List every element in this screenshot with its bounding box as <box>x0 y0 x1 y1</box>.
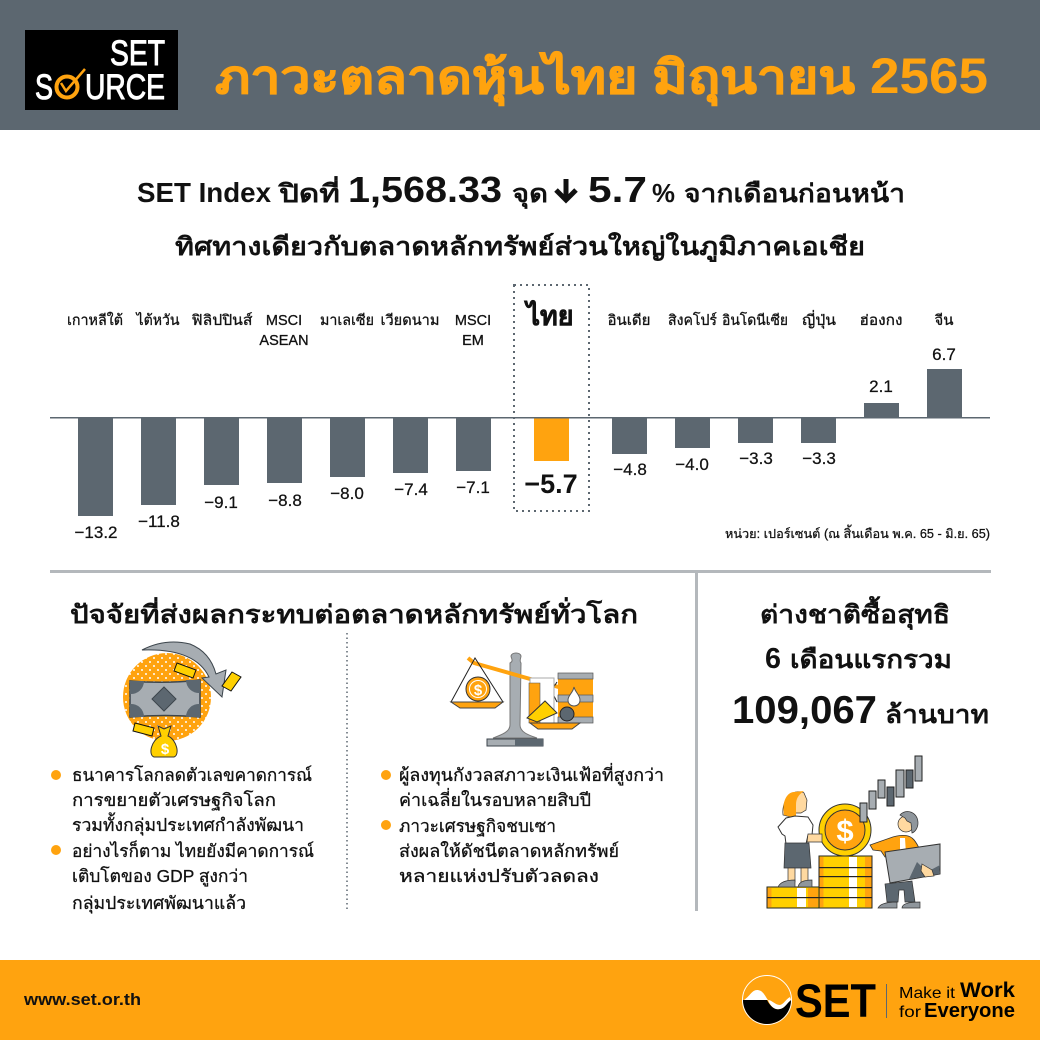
logo: SET <box>742 974 1015 1027</box>
text block: left bullets: ธนาคารโลกลดตัวเลขคาดการณ์ <box>72 765 312 785</box>
value labels: −5.7 <box>524 469 578 499</box>
headline: SET Index <box>137 177 271 208</box>
icon: investors and coins <box>767 756 940 908</box>
icon: down arrow <box>556 179 576 200</box>
value labels: −8.8 <box>268 491 302 510</box>
icon: falling banknote <box>123 642 241 758</box>
header band <box>0 0 1040 130</box>
value labels: −3.3 <box>802 449 836 468</box>
logo: SET: Everyone <box>924 1000 1015 1022</box>
title: 2565 <box>870 48 988 104</box>
text block: left bullets: การขยายตัวเศรษฐกิจโลก <box>72 790 276 811</box>
category labels: ไทย <box>524 300 574 331</box>
category labels: MSCI <box>266 313 302 329</box>
footer band <box>0 960 1040 1040</box>
headline: ปิดที่ <box>277 176 340 208</box>
value labels: −13.2 <box>74 523 118 542</box>
value labels: −8.0 <box>330 484 364 503</box>
headline: จุด <box>512 180 548 210</box>
panel: foreign net buy: 6 <box>765 643 781 675</box>
panel: foreign net buy: 109,067 <box>732 689 877 732</box>
panel: foreign net buy: ล้านบาท <box>885 701 989 729</box>
logo: SET: Make it <box>899 985 956 1002</box>
icon: scales <box>451 653 593 746</box>
category labels: ฟิลิปปินส์ <box>192 312 253 329</box>
category labels <box>67 300 954 349</box>
text block: right bullets: หลายแห่งปรับตัวลดลง <box>399 866 599 886</box>
category labels: มาเลเซีย <box>320 312 374 329</box>
panel: foreign net buy: ต่างชาติซื้อสุทธิ <box>760 595 950 631</box>
text block: left bullets: อย่างไรก็ตาม ไทยยังมีคาดการณ์ <box>72 840 314 861</box>
value labels: −11.8 <box>138 512 180 531</box>
category labels: อินเดีย <box>608 312 650 329</box>
text block: right bullets: ค่าเฉลี่ยในรอบหลายสิบปี <box>399 788 591 810</box>
logo: SET: for <box>899 1004 922 1021</box>
category labels: สิงคโปร์ <box>668 311 717 329</box>
value labels <box>74 345 956 542</box>
category labels: เกาหลีใต้ <box>67 311 123 329</box>
headline: 5.7 <box>588 169 647 210</box>
category labels: EM <box>462 333 484 349</box>
category labels: ญี่ปุ่น <box>802 310 836 329</box>
headline: % <box>652 178 675 208</box>
category labels: ASEAN <box>259 333 309 349</box>
text block: left bullets: รวมทั้งกลุ่มประเทศกำลังพัฒนา <box>72 812 304 836</box>
icon: falling banknote: $ <box>161 741 170 758</box>
panel: global factors heading: ปัจจัยที่ส่งผลกระทบต่อตลาดหลักทรัพย์ทั่วโลก <box>70 597 638 629</box>
category labels: จีน <box>934 312 954 329</box>
panel: foreign net buy: เดือนแรกรวม <box>790 646 952 674</box>
value labels: 2.1 <box>869 377 893 396</box>
category labels: MSCI <box>455 313 491 329</box>
category labels: เวียดนาม <box>380 312 440 329</box>
thai highlight box <box>514 285 589 511</box>
category labels: ไต้หวัน <box>136 311 180 329</box>
logo: SET Source <box>25 30 178 110</box>
logo: SET Source: URCE <box>85 68 165 107</box>
logo: SET: Work <box>960 979 1015 1002</box>
value labels: −7.1 <box>456 478 490 497</box>
category labels: อินโดนีเซีย <box>722 311 788 329</box>
logo: SET: SET <box>795 974 876 1027</box>
value labels: −9.1 <box>204 493 238 512</box>
text block: right bullets: ภาวะเศรษฐกิจชบเซา <box>399 816 556 837</box>
value labels: −4.0 <box>675 455 709 474</box>
website: www.set.or.th <box>23 991 141 1009</box>
value labels: −4.8 <box>613 460 647 479</box>
icon: investors and coins: $ <box>836 813 854 848</box>
logo: SET Source: SET <box>110 34 165 73</box>
text block: left bullets <box>51 765 314 914</box>
bar chart <box>50 285 990 542</box>
value labels: 6.7 <box>932 345 956 364</box>
text block: left bullets: เติบโตของ GDP สูงกว่า <box>72 866 248 887</box>
text block: right bullets: ผู้ลงทุนกังวลสภาวะเงินเฟ้อที่สูงกว่า <box>399 763 664 786</box>
category labels: ฮ่องกง <box>860 313 902 329</box>
text block: right bullets <box>381 763 664 886</box>
headline <box>137 169 905 263</box>
value labels: −3.3 <box>739 449 773 468</box>
icon: scales: $ <box>474 682 483 699</box>
unit note: หน่วย: เปอร์เซนต์ (ณ สิ้นเดือน พ.ค. 65 - มิ.ย. 65) <box>725 524 990 541</box>
text block: right bullets: ส่งผลให้ดัชนีตลาดหลักทรัพย์ <box>399 841 619 861</box>
headline: 1,568.33 <box>348 169 502 210</box>
headline: จากเดือนก่อนหน้า <box>684 180 905 208</box>
text block: left bullets: กลุ่มประเทศพัฒนาแล้ว <box>72 893 246 914</box>
title: ภาวะตลาดหุ้นไทย มิถุนายน <box>215 51 856 106</box>
headline: ทิศทางเดียวกับตลาดหลักทรัพย์ส่วนใหญ่ในภูมิภาคเอเชีย <box>175 231 865 263</box>
title <box>215 48 988 106</box>
logo: SET Source: S <box>35 68 53 107</box>
value labels: −7.4 <box>394 480 428 499</box>
panel: foreign net buy <box>732 595 989 908</box>
